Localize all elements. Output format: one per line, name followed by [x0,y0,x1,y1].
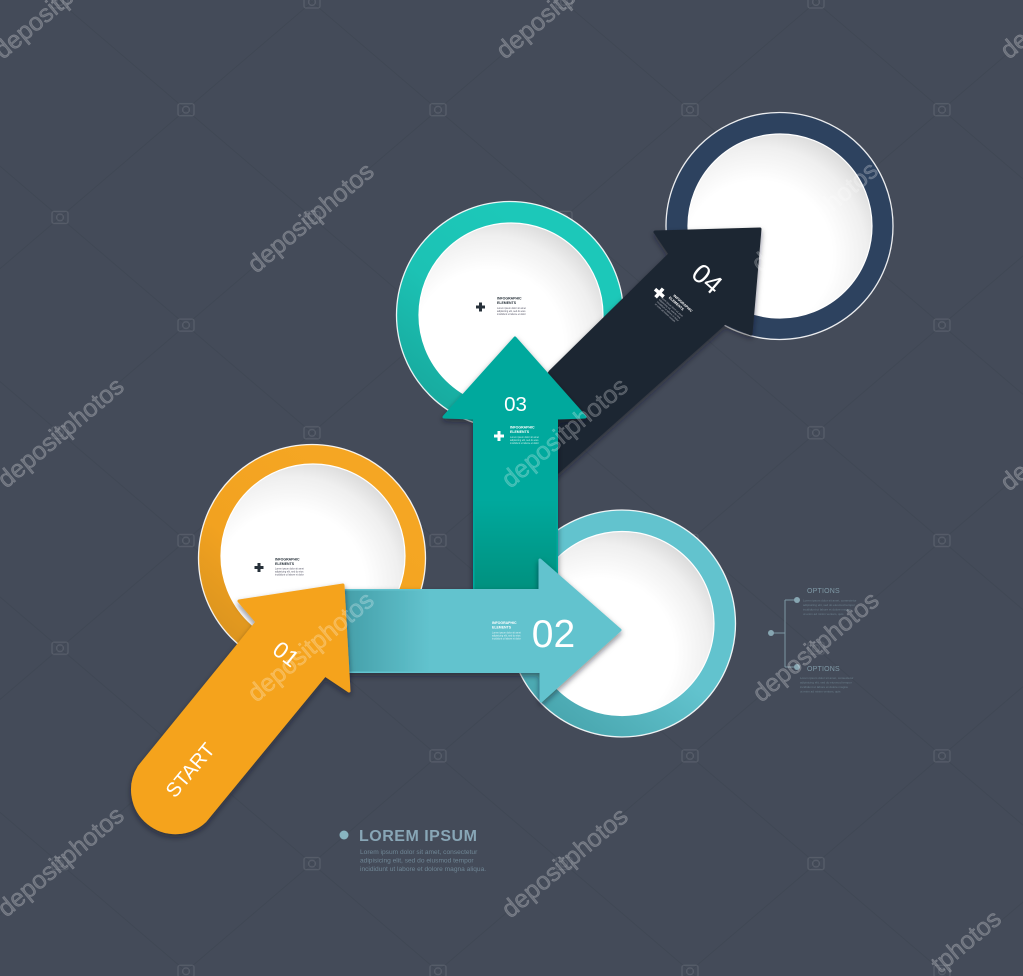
watermarks: depositphotos [242,157,379,279]
text: infographic elements on navy arrow: ELEMENTS [668,296,685,312]
footer text block: Lorem ipsum dolor sit amet, consectetur [360,849,478,856]
circle: step 1 orange ring [198,444,426,672]
text: infographic elements on blue arrow [492,621,521,640]
circle text: infographic elements in teal circle: INFOGRAPHIC [497,296,522,300]
circle text: infographic elements in teal circle: Lorem ipsum dolor sit amet [497,307,526,310]
label: 03: 03 [504,393,527,416]
options diagram [768,588,856,670]
text: infographic elements on blue arrow: INFOGRAPHIC [492,621,517,625]
circle text: infographic elements in orange circle: Lorem ipsum dolor sit amet [275,568,304,570]
footer title: lorem ipsum [340,828,486,873]
option 2 text [800,666,853,694]
option 1 text: OPTIONS [807,588,840,595]
option 2 text: OPTIONS [807,666,840,673]
icon: plus on teal arrow [494,431,504,441]
arrow 03: teal upward [444,338,585,592]
option 2 text: adipisicing elit, sed do eiusmod tempor [800,680,852,684]
arrow 01: orange start arrow [133,585,349,833]
option 1 text [803,588,856,616]
text: infographic elements on navy arrow: ut enim ad minim veniam [654,303,676,323]
watermarks: depositphotos [242,586,379,708]
arrow 04: navy diagonal [520,229,760,500]
circle: step 2 blue ring [508,510,736,737]
option 2 text: Lorem ipsum dolor sit amet, consectetur [800,676,853,680]
option 1 text: incididunt ut labore et dolore magna [803,608,851,612]
watermarks: depositphotos [496,372,633,494]
text: infographic elements on blue arrow: Lorem ipsum dolor sit amet [492,632,521,634]
text: infographic elements on navy arrow: Lorem ipsum dolor sit amet [660,296,684,318]
text: infographic elements on blue arrow: ELEMENTS [492,626,512,630]
watermarks: depositphotos [746,156,883,278]
footer title: lorem ipsum: LOREM IPSUM [359,828,477,845]
text: infographic elements on blue arrow: adipisicing elit, sed do eius [492,634,521,638]
label: 04: 04 [686,258,728,300]
label: 02: 02 [532,613,575,656]
circle text: infographic elements in orange circle: incididunt ut labore et dolor [275,574,304,576]
option 1 text: adipisicing elit, sed do eiusmod tempor [803,603,855,607]
option 2 text: ut enim ad minim veniam, quis [800,690,841,694]
circle text: infographic elements in teal circle: adipisicing elit, sed do eius [497,310,526,313]
text: infographic elements on teal arrow [510,426,539,445]
text: infographic elements on teal arrow: incididunt ut labore et dolor [510,442,539,445]
option 2 text: incididunt ut labore et dolore magna [800,685,848,689]
circle text: infographic elements in orange circle: adipisicing elit, sed do eius [275,570,304,574]
watermarks: depositphotos [496,802,633,924]
text: infographic elements on navy arrow: INFOGRAPHIC [672,294,694,313]
icon: plus on navy arrow [651,285,667,301]
circle text: infographic elements in teal circle [476,296,526,316]
footer text block: adipisicing elit, sed do eiusmod tempor [360,858,474,864]
arrow 02: light blue rightward [340,560,620,701]
watermarks: depositphotos [747,586,884,708]
circle text: infographic elements in orange circle: ELEMENTS [275,562,295,566]
circle text: infographic elements in teal circle: incididunt ut labore et dolor [497,313,526,316]
option 1 text: ut enim ad minim veniam, quis [803,612,844,616]
text: infographic elements on teal arrow: INFOGRAPHIC [510,426,535,430]
circle: step 4 navy ring [666,112,893,340]
label: start: START [162,739,220,802]
text: infographic elements on blue arrow: incididunt ut labore et dolor [492,638,521,640]
footer text block: incididunt ut labore et dolore magna aliqua. [360,866,486,873]
circle text: infographic elements in teal circle: ELEMENTS [497,301,517,305]
text: infographic elements on teal arrow: adipisicing elit, sed do eius [510,439,539,442]
circle: step 3 teal ring [396,202,624,428]
text: infographic elements on teal arrow: ELEMENTS [510,430,530,434]
footer text block [360,849,486,873]
label: 01: 01 [268,636,304,672]
text: infographic elements on navy arrow [654,288,694,327]
text: infographic elements on navy arrow: adipisicing elit, sed do eius [658,298,682,320]
circle text: infographic elements in orange circle: INFOGRAPHIC [275,558,300,562]
circle text: infographic elements in orange circle [254,558,304,576]
text: infographic elements on teal arrow: Lorem ipsum dolor sit amet [510,436,539,439]
option 1 text: Lorem ipsum dolor sit amet, consectetur [803,598,856,602]
text: infographic elements on navy arrow: incididunt ut labore et dolor [656,301,680,322]
